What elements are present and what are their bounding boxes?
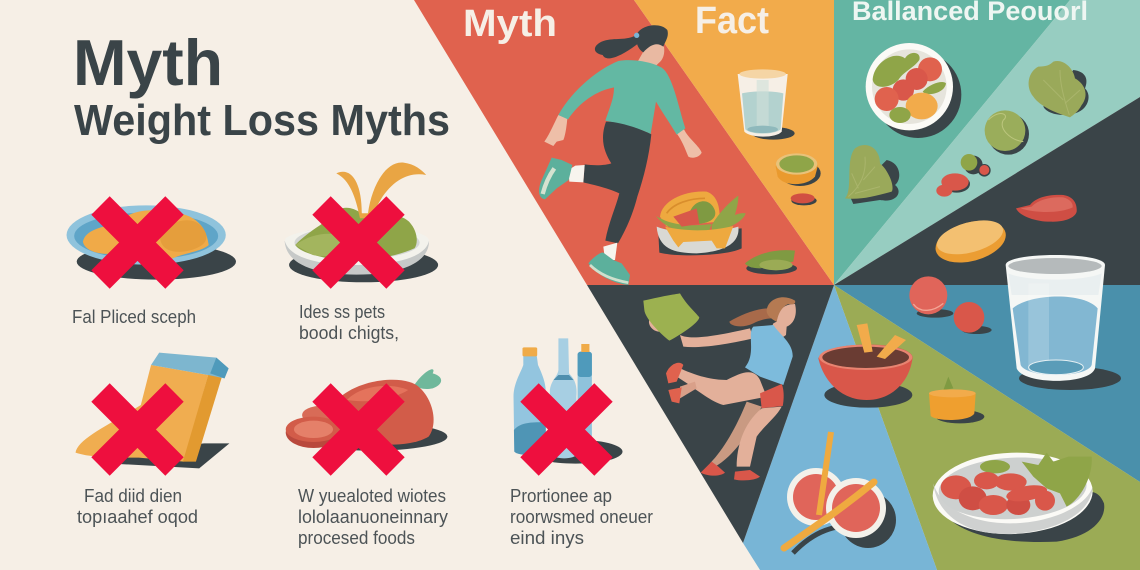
illustration: running woman in green sweater	[539, 25, 702, 285]
text: fifth myth label: eind inys	[510, 528, 584, 548]
text: third myth label: Fad diid dien	[84, 486, 182, 506]
text: second myth label: Ides ss pets	[299, 302, 385, 322]
title: Weight Loss Myths	[74, 96, 450, 145]
text: fourth myth label: procesed foods	[298, 528, 415, 548]
text: fifth myth label: roorwsmed oneuer	[510, 507, 653, 527]
icon: orange cheese block	[929, 377, 984, 423]
icon: lettuce leaf left	[845, 145, 899, 204]
icon: cups of tomato sauce with orange sticks	[784, 432, 896, 553]
text: fourth myth label: lololaanuoneinnary	[298, 507, 448, 527]
text: fifth myth label	[510, 486, 653, 548]
icon: red meat slice	[1016, 195, 1077, 222]
panel: radial colour segments	[414, 0, 1140, 570]
icon: cucumbers	[745, 250, 797, 274]
icon: lettuce leaf right	[1029, 61, 1089, 117]
illustration: running woman in blue shirt	[666, 297, 796, 480]
text: third myth label: topıaahef oqod	[77, 507, 198, 527]
text: fourth myth label	[298, 486, 448, 548]
icon: crossed-out cereal box	[76, 353, 229, 468]
heading: Fact segment: Fact	[695, 0, 769, 42]
icon: crossed-out orange food plate	[67, 205, 236, 280]
icon: green ball fruits and red slices	[936, 110, 1029, 197]
text: second myth label	[299, 302, 399, 343]
icon: tomatoes	[909, 276, 992, 334]
text: fourth myth label: W yuealoted wiotes	[298, 486, 446, 506]
icon: crossed-out meat	[286, 369, 447, 466]
icon: red soup bowl with sticks	[818, 323, 913, 408]
icon: green dip cup and red disc	[776, 153, 821, 205]
illustration: salad basket	[656, 191, 746, 255]
title: Myth	[73, 26, 223, 99]
icon: crossed-out water bottles	[514, 338, 623, 466]
heading: Myth segment: Myth	[463, 3, 557, 45]
icon: orange half	[931, 214, 1010, 270]
icon: plate of sliced sausage and greens	[931, 450, 1104, 542]
icon: glass of water on orange segment	[738, 69, 795, 140]
text: third myth label	[77, 486, 198, 527]
text: first myth label: Fal Pliced sceph	[72, 307, 196, 327]
text: fifth myth label: Prortionee ap	[510, 486, 612, 506]
icon: green bread slice	[643, 293, 699, 341]
icon: fruit and salad plate	[866, 43, 961, 138]
text: second myth label: boodı chigts,	[299, 323, 399, 343]
icon: crossed-out green food bowl	[285, 163, 438, 282]
icon: large water glass	[1006, 255, 1121, 390]
title	[73, 26, 450, 145]
